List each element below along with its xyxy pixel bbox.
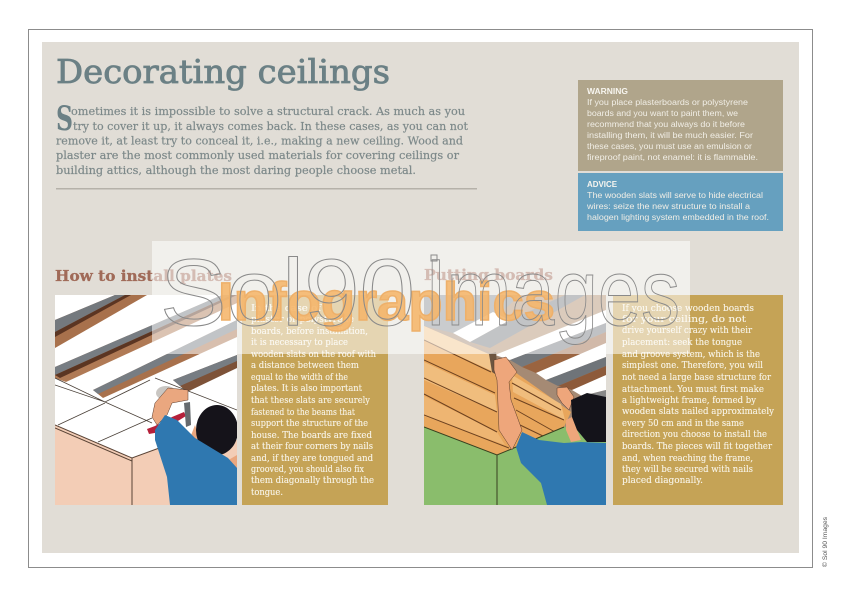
gold text box: boards: If you choose wooden boards bbox=[622, 304, 754, 314]
watermark bbox=[152, 240, 690, 354]
ceiling plate lines bbox=[55, 378, 237, 442]
gold text box: boards: placed diagonally. bbox=[622, 476, 703, 486]
gold text box: boards: boards. The pieces will fit together bbox=[622, 442, 773, 452]
gold text box: plates: that these slats are securely bbox=[251, 396, 370, 406]
intro text block: try to cover it up, it always comes back. In these cases, as you can not bbox=[73, 119, 468, 133]
gold text box: boards: not need a large base structure for bbox=[622, 373, 772, 383]
worker shirt bbox=[516, 432, 606, 505]
intro text block bbox=[56, 99, 468, 177]
illustration: putting wooden boards bbox=[424, 295, 606, 505]
gold text box: plates: house. The boards are fixed bbox=[251, 431, 372, 441]
advice box bbox=[578, 173, 783, 231]
gold text box: plates: equal to the width of the bbox=[251, 373, 348, 383]
advice box: ADVICE bbox=[587, 179, 617, 189]
gold text box: boards: placement: seek the tongue bbox=[622, 338, 742, 348]
advice box: The wooden slats will serve to hide electrical bbox=[587, 190, 763, 200]
gold text box: boards: drive yourself crazy with their bbox=[622, 326, 753, 336]
wooden boards bbox=[424, 326, 571, 455]
gold text box: plates: In the case of bbox=[251, 304, 322, 314]
gold text box: plates: grooved, you should also fix bbox=[251, 465, 364, 475]
intro text block: building attics, although the most daring people choose metal. bbox=[56, 163, 416, 177]
warning box: If you place plasterboards or polystyrene bbox=[587, 97, 748, 107]
worker face bbox=[566, 417, 581, 442]
title: Decorating ceilings bbox=[56, 52, 390, 91]
warning box: installing them, it will be much easier. For bbox=[587, 130, 753, 140]
worker shirt bbox=[155, 415, 237, 505]
illustration: installing ceiling plates bbox=[55, 295, 238, 505]
gold text box: boards: they will be secured with nails bbox=[622, 465, 753, 475]
worker hair bbox=[571, 393, 606, 442]
walls bbox=[55, 425, 237, 505]
warning box: these cases, you must use an emulsion or bbox=[587, 141, 752, 151]
warning box bbox=[578, 80, 783, 171]
gold text box: plates: support the structure of the bbox=[251, 419, 368, 429]
gold text box: boards: simplest one. Therefore, you will bbox=[622, 361, 763, 371]
gold text box: boards: every 50 cm and in the same bbox=[622, 419, 744, 429]
gold text box: boards: direction you choose to install the bbox=[622, 430, 767, 440]
beams and white gaps bbox=[424, 295, 606, 400]
warning box: recommend that you always do it before bbox=[587, 119, 745, 129]
gold text box: plates: wooden slats on the roof with bbox=[251, 350, 376, 360]
warning box: boards and you want to paint them, we bbox=[587, 108, 738, 118]
gold text box: plates: at their four corners by nails bbox=[251, 442, 373, 452]
intro text block: S bbox=[56, 99, 73, 139]
gold text box: plates bbox=[242, 295, 388, 505]
intro text block: remove it, at least try to conceal it, i.e., making a new ceiling. Wood and bbox=[56, 134, 464, 148]
gold text box: boards: and, when reaching the frame, bbox=[622, 454, 753, 464]
gold text box: plates: it is necessary to place bbox=[251, 338, 348, 348]
copyright note: © Sol 90 Images bbox=[821, 516, 829, 567]
background panel bbox=[42, 42, 799, 553]
worker face bbox=[190, 425, 237, 470]
advice box: wires: seize the new structure to install a bbox=[586, 201, 750, 211]
gold text box: plates: tongue. bbox=[251, 488, 283, 498]
gold text box: boards: for your ceiling, do not bbox=[622, 315, 747, 325]
gold text box: boards: wooden slats nailed approximately bbox=[622, 407, 774, 417]
intro text block: ometimes it is impossible to solve a structural crack. As much as you bbox=[71, 104, 466, 118]
gold text box: boards: a lightweight frame, formed by bbox=[622, 396, 756, 406]
gold text box: plates: plaster or polystyrene bbox=[251, 315, 354, 325]
ceiling plate being held bbox=[156, 386, 174, 398]
worker arm bbox=[152, 388, 188, 425]
gold text box: boards bbox=[613, 295, 783, 505]
advice box: halogen lighting system embedded in the roof. bbox=[587, 212, 769, 222]
watermark: Images bbox=[425, 240, 680, 346]
green walls bbox=[424, 420, 606, 505]
warning box: WARNING bbox=[587, 86, 628, 96]
gold text box: plates: and, if they are tongued and bbox=[251, 454, 373, 464]
held board end bbox=[489, 352, 496, 374]
worker hair bbox=[196, 405, 238, 455]
beams bbox=[55, 295, 237, 398]
hammer bbox=[147, 402, 191, 434]
watermark: Sol90 bbox=[160, 240, 415, 346]
gold text box: plates: them diagonally through the bbox=[251, 476, 374, 486]
watermark: Infographics bbox=[218, 272, 555, 332]
gold text box: boards: attachment. You must first make bbox=[622, 385, 764, 395]
heading: putting boards: Putting boards bbox=[424, 266, 553, 284]
gold text box: boards: and groove system, which is the bbox=[622, 350, 760, 360]
gold text box: plates: boards, before installation, bbox=[251, 327, 368, 337]
gold text box: plates: fastened to the beams that bbox=[251, 408, 355, 418]
intro text block: plaster are the most commonly used materials for covering ceilings or bbox=[56, 148, 459, 162]
warning box: fireproof paint, not enamel: it is flammable. bbox=[587, 152, 758, 162]
heading: how to install plates: How to install plates bbox=[55, 267, 232, 285]
worker arm and hand bbox=[494, 357, 522, 450]
gold text box: plates: a distance between them bbox=[251, 361, 360, 371]
gold text box: plates: plates. It is also important bbox=[251, 384, 362, 394]
